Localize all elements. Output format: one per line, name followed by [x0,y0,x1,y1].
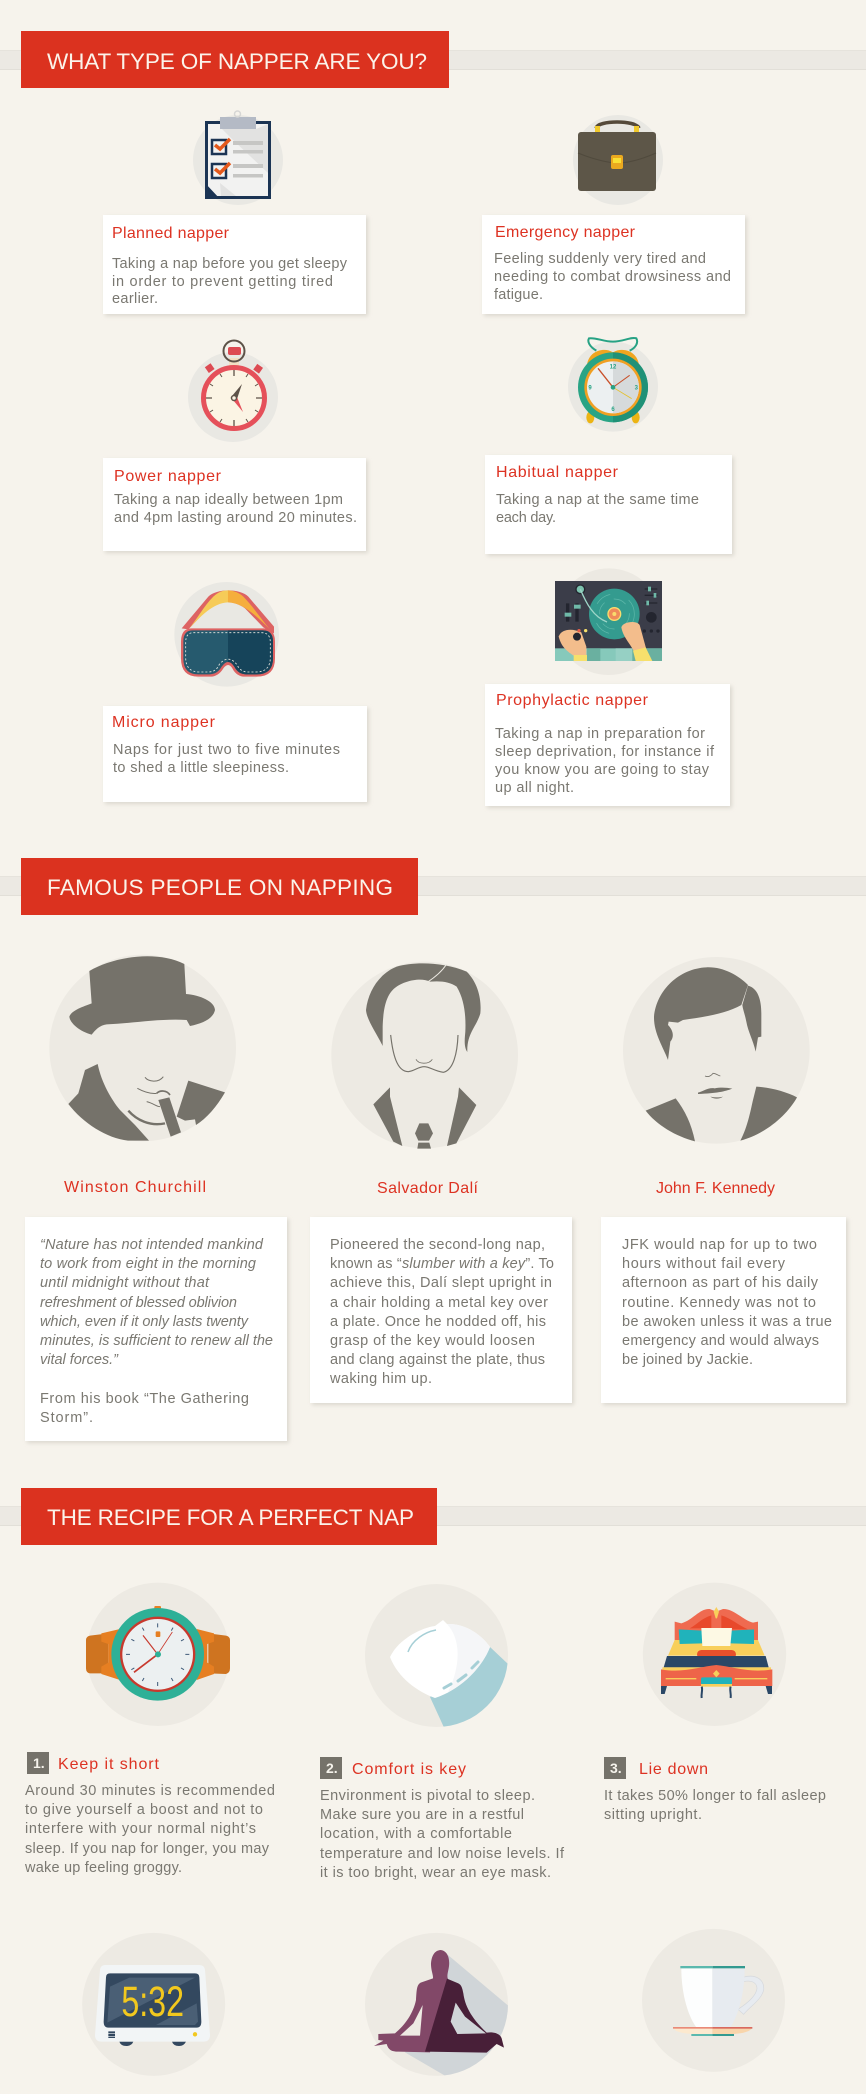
card: Dali description [310,1217,572,1403]
card: Dali description: and clang against the plate, thus [330,1352,545,1368]
card: Churchill quote: vital forces.” [40,1352,119,1368]
icon: turntable [555,568,662,675]
text: keep it short description: to give yourself a boost and not to [25,1802,263,1818]
card: Churchill quote: minutes, is sufficient to renew all the [40,1333,273,1349]
text: emergency napper description: fatigue. [494,287,543,303]
card: habitual napper [485,455,732,554]
portrait: John F. Kennedy [623,957,810,1144]
section header: what type of napper [0,31,866,88]
card: Churchill quote: Storm”. [40,1410,93,1426]
step 3: lie down [604,1757,826,1823]
icon: meditating figure [365,1933,513,2083]
text: keep it short description: sleep. If you nap for longer, you may [25,1841,270,1857]
icon: tea cup [642,1929,785,2072]
icon: alarm clock [568,338,658,432]
portrait: Salvador Dali [331,962,518,1149]
text: prophylactic napper description: sleep deprivation, for instance if [495,744,715,760]
card: emergency napper [482,215,745,314]
card: Churchill quote: “Nature has not intended mankind [40,1237,264,1253]
step 2: comfort is key [320,1757,565,1881]
icon: alarm clock: 3 [635,386,639,392]
text: planned napper description: in order to prevent getting tired [112,274,333,290]
icon: alarm clock: 6 [611,407,615,413]
portrait: Winston Churchill [49,955,236,1141]
card: Churchill quote: until midnight without that [40,1275,210,1291]
heading: keep it short: Keep it short [58,1756,160,1773]
text: micro napper description: to shed a little sleepiness. [113,760,289,776]
name: Winston Churchill: Winston Churchill [64,1179,206,1196]
card: Churchill quote: refreshment of blessed oblivion [40,1295,237,1311]
card: Churchill quote: to work from eight in the morning [40,1256,256,1272]
card: Kennedy description: emergency and would always [622,1333,819,1349]
text: prophylactic napper description [495,726,715,796]
section header: famous people: FAMOUS PEOPLE ON NAPPING [47,875,393,900]
section header: recipe [0,1488,866,1545]
icon: wrist watch [86,1583,230,1726]
icon: sleep mask [174,582,279,687]
text: keep it short description: Around 30 minutes is recommended [25,1783,275,1799]
card: Kennedy description: be joined by Jackie. [622,1352,753,1368]
text: power napper description: and 4pm lasting around 20 minutes. [114,510,357,526]
text: power napper description: Taking a nap ideally between 1pm [114,492,343,508]
text: keep it short description [24,1783,275,1876]
card: Kennedy description: routine. Kennedy was not to [622,1295,816,1311]
text: prophylactic napper description: up all night. [495,780,574,796]
heading: planned napper: Planned napper [112,225,230,242]
heading: comfort is key: Comfort is key [352,1761,466,1778]
text: habitual napper description: each day. [496,510,556,526]
text: planned napper description: Taking a nap before you get sleepy [112,256,348,272]
text: emergency napper description: Feeling suddenly very tired and [494,251,706,267]
card: Kennedy description: afternoon as part of his daily [622,1275,819,1291]
text: habitual napper description [496,492,699,526]
card: Kennedy description [601,1217,846,1403]
step 1: keep it short [24,1752,275,1876]
name: Salvador Dali: Salvador Dalí [377,1180,479,1197]
card: Dali description: Pioneered the second-long nap, [330,1237,545,1253]
text: comfort is key description: location, with a comfortable [320,1826,512,1842]
card: Dali description: waking him up. [329,1371,432,1387]
text: micro napper description: Naps for just two to five minutes [113,742,340,758]
text: micro napper description [113,742,340,776]
text: planned napper description [112,256,348,307]
number badge 2: 2. [326,1760,338,1776]
card: Churchill quote: From his book “The Gathering [40,1391,249,1407]
number badge 3 [604,1757,626,1779]
number badge 2 [320,1757,342,1779]
card: Dali description: grasp of the key would loosen [330,1333,535,1349]
heading: power napper: Power napper [114,468,222,485]
text: prophylactic napper description: Taking a nap in preparation for [495,726,705,742]
icon: bed [643,1583,786,1726]
card: prophylactic napper [485,684,730,806]
icon: briefcase [573,115,663,205]
heading: prophylactic napper: Prophylactic napper [496,692,649,709]
number badge 1 [27,1752,49,1774]
section header: famous people [0,858,866,915]
icon: clipboard [193,111,283,205]
text: prophylactic napper description: you know you are going to stay [495,762,710,778]
number badge 1: 1. [33,1755,45,1771]
icon: digital clock: 5:32 [121,1978,184,2026]
text: lie down description [604,1788,826,1823]
card: Churchill quote: which, even if it only lasts twenty [40,1314,249,1330]
icon: alarm clock: 12 [610,364,617,370]
text: comfort is key description: Make sure you are in a restful [320,1807,524,1823]
text: comfort is key description: it is too bright, wear an eye mask. [320,1865,551,1881]
section header: recipe: THE RECIPE FOR A PERFECT NAP [47,1505,414,1530]
text: comfort is key description: Environment is pivotal to sleep. [320,1788,535,1804]
text: power napper description [114,492,357,526]
text: comfort is key description [320,1788,565,1881]
icon: stopwatch [188,340,278,442]
text: lie down description: It takes 50% longer to fall asleep [604,1788,826,1804]
heading: habitual napper: Habitual napper [496,464,619,481]
card: Dali description: a plate. Once he nodded off, his [330,1314,546,1330]
heading: micro napper: Micro napper [112,714,216,731]
number badge 3: 3. [610,1760,622,1776]
card: power napper [103,458,366,551]
text: planned napper description: earlier. [112,291,158,307]
card: Kennedy description: be awoken unless it was a true [622,1314,832,1330]
text: emergency napper description: needing to combat drowsiness and [494,269,731,285]
card: Churchill quote [25,1217,287,1441]
name: John F. Kennedy: John F. Kennedy [656,1180,775,1197]
icon: pillow [365,1584,508,1727]
card: micro napper [103,706,367,802]
text: habitual napper description: Taking a nap at the same time [496,492,699,508]
card: planned napper [103,215,366,314]
text: emergency napper description [494,251,731,303]
heading: emergency napper: Emergency napper [495,224,636,241]
text: comfort is key description: temperature and low noise levels. If [320,1846,565,1862]
card: Dali description: a chair holding a metal key over [330,1295,548,1311]
text: lie down description: sitting upright. [604,1807,702,1823]
card: Dali description: achieve this, Dalí slept upright in [330,1275,552,1291]
heading: lie down: Lie down [639,1761,708,1778]
icon: alarm clock: 9 [588,386,592,392]
text: keep it short description: wake up feeling groggy. [24,1860,182,1876]
section header: what type of napper: WHAT TYPE OF NAPPER ARE YOU? [47,49,427,74]
card: Dali description: known as “slumber with a key”. To [330,1256,554,1272]
icon: digital clock [82,1933,225,2076]
text: keep it short description: interfere with your normal night’s [25,1821,256,1837]
card: Kennedy description: JFK would nap for up to two [622,1237,817,1253]
card: Kennedy description: hours without fail every [622,1256,786,1272]
